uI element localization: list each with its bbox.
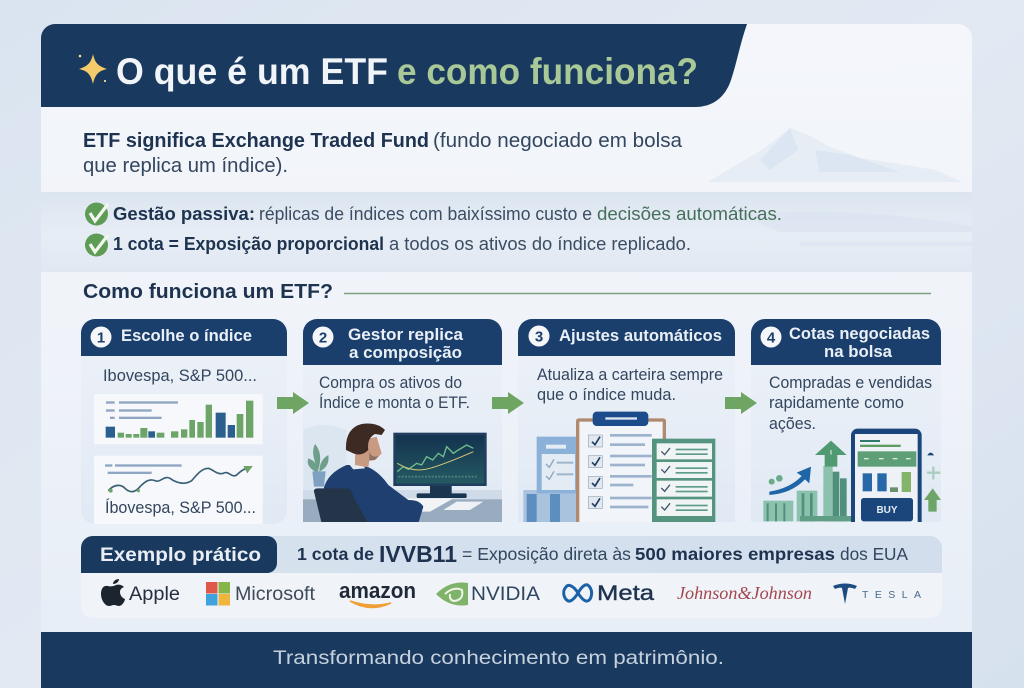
icon: check 2	[85, 234, 108, 256]
step title: a composição	[349, 344, 462, 362]
header banner	[41, 24, 747, 107]
example statement: IVVB11	[379, 541, 457, 567]
point: passive management	[113, 203, 782, 224]
section heading: Como funciona um ETF?	[83, 281, 333, 303]
step text	[537, 366, 723, 404]
buy label: BUY	[876, 505, 898, 516]
step text: Atualiza a carteira sempre	[537, 366, 723, 384]
step text	[319, 374, 470, 412]
example statement: 1 cota de	[297, 544, 374, 564]
logo: Johnson & Johnson: Johnson&Johnson	[677, 583, 812, 603]
body	[323, 465, 423, 523]
intro text: (fundo negociado em bolsa	[433, 130, 683, 152]
point: passive management: réplicas de índices com baixíssimo custo e	[259, 203, 592, 224]
head	[355, 437, 382, 467]
point: proportional exposure	[113, 233, 691, 254]
blue document	[537, 437, 578, 493]
step text: que o índice muda.	[537, 386, 676, 404]
panel: step 3	[518, 319, 735, 525]
panel: step 2	[302, 319, 505, 523]
logo: Meta	[564, 582, 654, 605]
logo: Meta: Meta	[597, 582, 654, 605]
clipboard	[576, 418, 666, 525]
example statement: dos EUA	[840, 544, 908, 564]
green checklist	[652, 439, 715, 525]
logo: NVIDIA: NVIDIA	[471, 584, 540, 605]
step title: na bolsa	[824, 343, 893, 361]
logo: Apple: Apple	[129, 584, 180, 605]
chair	[314, 488, 368, 523]
arrow 3	[725, 392, 757, 414]
step text: Índice e monta o ETF.	[319, 393, 470, 412]
step number	[760, 326, 782, 348]
step title: Escolhe o índice	[121, 327, 252, 345]
bar chart	[94, 394, 263, 444]
step number: 3	[535, 328, 543, 346]
intro text	[83, 130, 683, 177]
illustration: trading app	[763, 429, 941, 524]
plant	[308, 444, 329, 473]
point: passive management: Gestão passiva:	[113, 203, 255, 224]
arrow 2	[492, 392, 524, 414]
monitor	[393, 433, 487, 486]
point: passive management: decisões automáticas.	[597, 203, 782, 224]
point: proportional exposure: a todos os ativos do índice replicado.	[389, 233, 691, 254]
panel: step 4	[751, 319, 941, 524]
example statement: 500 maiores empresas	[635, 544, 835, 564]
step text	[769, 374, 932, 433]
line chart	[94, 456, 263, 524]
trend arrow	[769, 467, 811, 495]
step title: Gestor replica	[348, 326, 464, 344]
step title: Cotas negociadas	[789, 325, 930, 343]
side icons	[924, 488, 941, 512]
watermark: mountain	[708, 128, 962, 182]
panel: step 1	[81, 319, 287, 524]
step text: Compradas e vendidas	[769, 374, 932, 392]
up arrow	[815, 441, 847, 467]
intro text: que replica um índice).	[83, 155, 288, 177]
example label: Exemplo prático	[100, 545, 261, 566]
logo: Amazon: amazon	[339, 578, 416, 603]
illustration: manager at computer	[302, 423, 505, 523]
step number	[312, 326, 334, 348]
step title: Ajustes automáticos	[559, 327, 722, 345]
footer: Transformando conhecimento em patrimônio.	[273, 648, 724, 669]
step title	[789, 325, 930, 361]
desk papers	[400, 498, 453, 512]
step number: 4	[767, 330, 776, 346]
step text: rapidamente como	[769, 394, 904, 412]
icon: sparkle	[79, 54, 107, 84]
step number: 2	[319, 330, 327, 346]
step text: ações.	[769, 415, 816, 433]
step number	[528, 326, 550, 346]
logo: Apple	[101, 579, 180, 606]
illustration: checklists	[523, 412, 715, 525]
step number	[90, 326, 112, 348]
logo: Microsoft	[206, 582, 316, 606]
point: proportional exposure: 1 cota = Exposição proporcional	[113, 233, 384, 254]
example statement: = Exposição direta às	[462, 544, 631, 564]
logo: Tesla	[833, 584, 925, 604]
step title	[348, 326, 464, 362]
panel: key points band	[41, 192, 972, 272]
phone	[851, 429, 922, 523]
step text: Ibovespa, S&P 500...	[103, 367, 257, 385]
footer	[41, 632, 972, 688]
title accent: e como funciona?	[397, 51, 698, 92]
logo: Tesla: TESLA	[862, 589, 925, 601]
panel: practical example	[81, 536, 942, 618]
example statement	[297, 541, 908, 567]
example label	[81, 536, 277, 573]
skyline	[523, 490, 577, 523]
bars	[763, 466, 833, 521]
arrow 1	[277, 392, 309, 414]
title: O que é um ETF	[116, 51, 388, 92]
step number: 1	[97, 330, 105, 346]
intro text: ETF significa Exchange Traded Fund	[83, 130, 429, 152]
logo: NVIDIA	[436, 582, 540, 606]
step text: Compra os ativos do	[319, 374, 462, 392]
logo: Microsoft: Microsoft	[235, 584, 316, 605]
icon: check 1	[85, 203, 108, 226]
chart caption: Íbovespa, S&P 500...	[105, 498, 256, 517]
